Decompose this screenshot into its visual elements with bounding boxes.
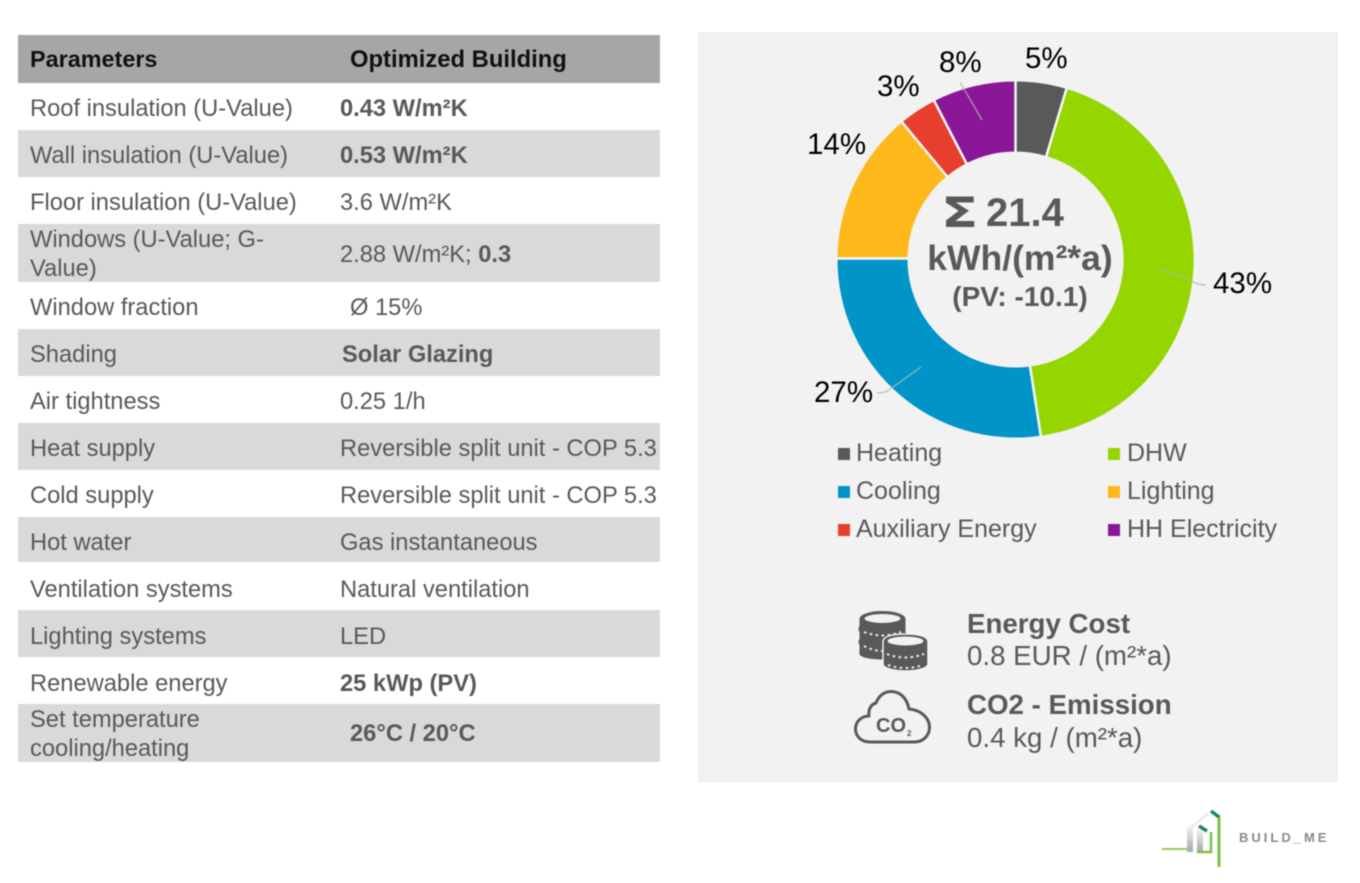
label: 5%: 5% bbox=[1025, 42, 1068, 75]
table header: Optimized Building bbox=[350, 46, 567, 73]
label: 27%: 27% bbox=[814, 376, 873, 409]
table header: Parameters bbox=[30, 46, 157, 72]
row: hot water: Gas instantaneous bbox=[340, 530, 538, 556]
total value bbox=[941, 188, 1064, 237]
row: ventilation systems: Ventilation systems bbox=[30, 576, 233, 602]
row: air tightness bbox=[30, 388, 426, 415]
row: heat supply bbox=[18, 423, 660, 470]
segment: DHW bbox=[1030, 89, 1194, 436]
row: shading: Shading bbox=[30, 342, 117, 368]
row: hot water bbox=[18, 517, 660, 562]
row: wall insulation: Wall insulation (U-Value) bbox=[30, 142, 288, 168]
row: shading: Solar Glazing bbox=[342, 342, 493, 368]
row: heat supply: Heat supply bbox=[30, 436, 155, 462]
row: set temperature: Set temperature bbox=[30, 707, 200, 733]
segment: heating bbox=[1016, 81, 1066, 156]
row: ventilation systems: Natural ventilation bbox=[340, 576, 530, 602]
row: wall insulation bbox=[18, 130, 660, 177]
segment: cooling bbox=[838, 260, 1040, 438]
row: air tightness: 0.25 1/h bbox=[340, 388, 426, 414]
row: air tightness: Air tightness bbox=[30, 388, 160, 414]
metric: energy cost: 0.8 EUR / (m²*a) bbox=[967, 640, 1172, 671]
leader lines bbox=[877, 82, 1206, 393]
legend: auxiliary energy: Auxiliary Energy bbox=[856, 515, 1037, 543]
row: cold supply bbox=[30, 482, 657, 509]
legend: DHW: DHW bbox=[1127, 439, 1187, 467]
row: renewable energy: Renewable energy bbox=[30, 670, 228, 696]
row: floor insulation: 3.6 W/m²K bbox=[340, 190, 452, 216]
icon: CO2 cloud bbox=[853, 689, 932, 744]
row: roof insulation: Roof insulation (U-Value) bbox=[30, 96, 293, 122]
segment dividers bbox=[836, 80, 1067, 437]
row: windows bbox=[18, 224, 660, 282]
legend: heating: Heating bbox=[856, 439, 942, 467]
legend: cooling: Cooling bbox=[856, 477, 941, 505]
logo: BUILD_ME bbox=[1161, 809, 1329, 868]
row: window fraction bbox=[30, 294, 422, 320]
PV offset: (PV: -10.1) bbox=[952, 281, 1088, 312]
row: hot water: Hot water bbox=[30, 530, 131, 556]
row: set temperature: 26°C / 20°C bbox=[350, 721, 476, 747]
legend: lighting: Lighting bbox=[1127, 477, 1215, 505]
row: windows: Windows (U-Value; G- bbox=[30, 227, 264, 253]
label: 43%: 43% bbox=[1213, 267, 1272, 300]
donut center total bbox=[927, 188, 1113, 313]
row: lighting systems: Lighting systems bbox=[30, 624, 206, 650]
row: roof insulation: 0.43 W/m²K bbox=[340, 96, 468, 122]
row: renewable energy: 25 kWp (PV) bbox=[340, 670, 477, 696]
table header bbox=[18, 35, 660, 83]
row: lighting systems bbox=[18, 610, 660, 657]
label: 8%: 8% bbox=[939, 46, 982, 79]
metric: energy cost: Energy Cost bbox=[967, 608, 1130, 639]
segment: HH electricity bbox=[934, 81, 1016, 163]
row: shading bbox=[18, 329, 660, 376]
total value: Σ bbox=[941, 188, 978, 237]
total unit: kWh/(m²*a) bbox=[927, 238, 1113, 278]
row: windows: Value) bbox=[30, 256, 97, 282]
total value: 21.4 bbox=[986, 191, 1064, 235]
row: cold supply: Reversible split unit - COP 5.3 bbox=[340, 482, 657, 508]
segment: lighting bbox=[838, 122, 947, 260]
logo mark bbox=[1161, 809, 1222, 868]
icon: CO2 cloud: 2 bbox=[907, 729, 912, 738]
segment: auxiliary energy bbox=[902, 101, 966, 176]
row: floor insulation: Floor insulation (U-Value) bbox=[30, 190, 297, 216]
row: windows: 2.88 W/m²K; 0.3 bbox=[340, 242, 511, 268]
row: window fraction: Window fraction bbox=[30, 294, 199, 320]
table: building parameters bbox=[18, 34, 660, 762]
row: floor insulation bbox=[30, 190, 452, 216]
row: set temperature: cooling/heating bbox=[30, 736, 189, 762]
label: 3%: 3% bbox=[877, 70, 920, 103]
icon: CO2 cloud: CO bbox=[876, 715, 906, 737]
row: ventilation systems bbox=[30, 576, 530, 603]
row: roof insulation bbox=[30, 96, 468, 122]
metric: CO2 emission bbox=[967, 689, 1172, 754]
panel: energy results bbox=[698, 32, 1338, 782]
legend: HH electricity: HH Electricity bbox=[1127, 515, 1277, 543]
row: set temperature bbox=[18, 704, 660, 762]
metric: energy cost bbox=[967, 608, 1172, 672]
metric: CO2 emission: CO2 - Emission bbox=[967, 689, 1172, 720]
row: window fraction: Ø 15% bbox=[350, 294, 422, 320]
label: 14%: 14% bbox=[807, 128, 866, 161]
row: renewable energy bbox=[30, 670, 477, 697]
row: lighting systems: LED bbox=[340, 624, 386, 650]
icon: coins bbox=[858, 610, 928, 671]
row: heat supply: Reversible split unit - COP 5.3 bbox=[340, 436, 657, 462]
row: wall insulation: 0.53 W/m²K bbox=[340, 142, 468, 168]
row: cold supply: Cold supply bbox=[30, 482, 154, 508]
metric: CO2 emission: 0.4 kg / (m²*a) bbox=[967, 722, 1142, 753]
legend bbox=[837, 439, 1278, 543]
logo wordmark: BUILD_ME bbox=[1239, 830, 1329, 845]
